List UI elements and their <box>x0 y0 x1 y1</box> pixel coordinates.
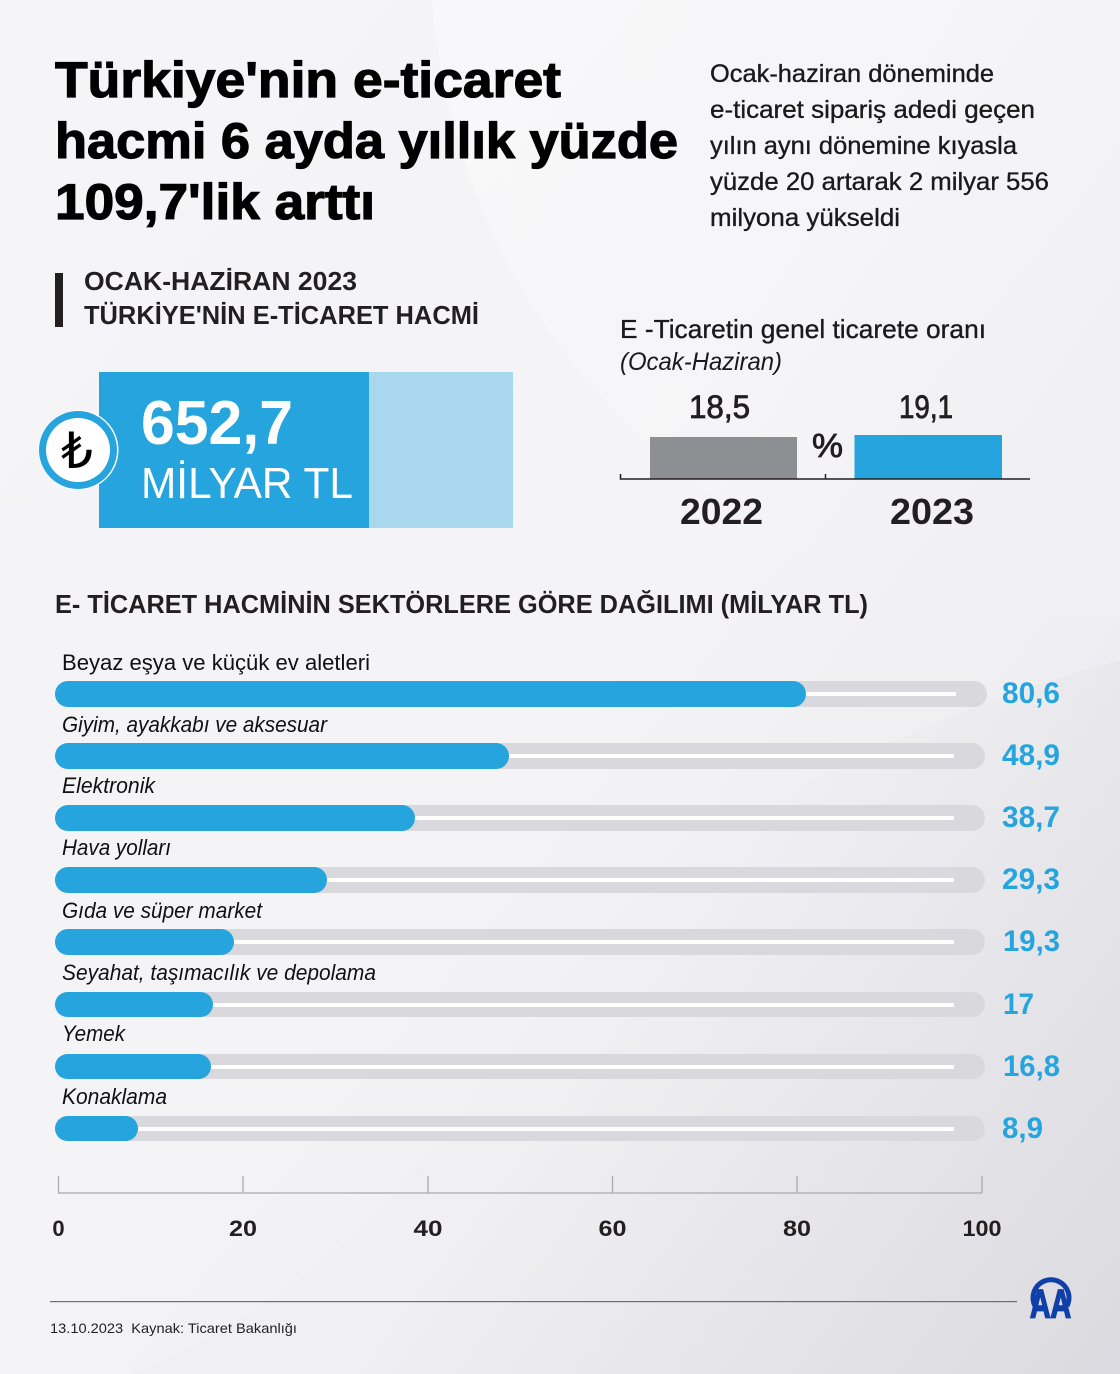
title: hacmi 6 ayda yıllık yüzde <box>55 113 678 169</box>
axis <box>620 474 1030 479</box>
section heading: total volume: TÜRKİYE'NİN E-TİCARET HACMİ <box>84 300 479 330</box>
intro text: e-ticaret sipariş adedi geçen <box>710 96 1035 124</box>
percent sign: % <box>812 427 843 464</box>
intro text <box>710 60 1049 232</box>
section heading: total volume: OCAK-HAZİRAN 2023 <box>84 266 357 296</box>
row: Giyim: 48,9 <box>1002 739 1060 772</box>
intro text: Ocak-haziran döneminde <box>710 60 994 88</box>
heading: sector breakdown: E- TİCARET HACMİNİN SEKTÖRLERE GÖRE DAĞILIMI (MİLYAR TL) <box>55 589 868 619</box>
year 2023: 2023 <box>890 491 974 532</box>
intro text: yılın aynı dönemine kıyasla <box>710 132 1017 160</box>
year 2022: 2022 <box>680 491 763 532</box>
total unit: MİLYAR TL <box>141 459 353 508</box>
row: Yemek <box>55 1021 1060 1083</box>
chart subheading: (Ocak-Haziran) <box>620 348 782 376</box>
logo: AA: AA <box>1030 1282 1071 1326</box>
row: Konaklama <box>55 1084 1043 1145</box>
x axis <box>52 1176 1002 1241</box>
row: Konaklama: 8,9 <box>1002 1112 1043 1145</box>
row: Beyaz eşya: Beyaz eşya ve küçük ev aletleri <box>62 650 370 675</box>
footer: date and source: 13.10.2023 Kaynak: Ticaret Bakanlığı <box>50 1320 297 1336</box>
x axis: 100 <box>962 1216 1002 1241</box>
row: Gıda: Gıda ve süper market <box>62 898 263 923</box>
total value: 652,7 <box>141 389 293 458</box>
title <box>55 52 678 230</box>
x axis: 80 <box>783 1216 811 1241</box>
row: Gıda: 19,3 <box>1003 925 1060 958</box>
x axis: 40 <box>414 1216 442 1241</box>
bar 2022 <box>650 437 797 479</box>
value 2023: 19,1 <box>899 389 953 425</box>
row: Seyahat: Seyahat, taşımacılık ve depolama <box>62 960 376 985</box>
row: Beyaz eşya <box>55 650 1060 710</box>
row: Elektronik: 38,7 <box>1002 801 1060 834</box>
row: Elektronik: Elektronik <box>62 773 156 798</box>
title: 109,7'lik arttı <box>55 174 375 230</box>
title: Türkiye'nin e-ticaret <box>55 52 561 108</box>
row: Gıda <box>55 898 1060 958</box>
section heading: total volume <box>55 266 479 330</box>
row: Yemek: Yemek <box>62 1021 126 1046</box>
bar chart: sectors <box>55 650 1060 1145</box>
x axis: 20 <box>229 1216 257 1241</box>
chart heading: E -Ticaretin genel ticarete oranı <box>620 314 986 344</box>
row: Seyahat <box>55 960 1034 1021</box>
x axis: 0 <box>52 1216 65 1241</box>
panel: total volume <box>38 372 513 528</box>
row: Yemek: 16,8 <box>1003 1050 1060 1083</box>
bar 2023 <box>854 435 1002 479</box>
row: Hava yolları <box>55 835 1060 896</box>
chart: e-commerce share of total trade <box>620 314 1030 532</box>
value 2022: 18,5 <box>689 389 750 425</box>
row: Giyim: Giyim, ayakkabı ve aksesuar <box>62 712 329 737</box>
row: Elektronik <box>55 773 1060 834</box>
intro text: milyona yükseldi <box>710 204 900 232</box>
row: Giyim <box>55 712 1060 772</box>
row: Hava yolları: Hava yolları <box>62 835 171 860</box>
row: Hava yolları: 29,3 <box>1002 863 1060 896</box>
row: Beyaz eşya: 80,6 <box>1002 677 1060 710</box>
row: Seyahat: 17 <box>1003 988 1034 1021</box>
icon: lira coin <box>38 410 118 490</box>
intro text: yüzde 20 artarak 2 milyar 556 <box>710 168 1049 196</box>
icon: lira coin: ₺ <box>61 422 93 480</box>
logo: AA <box>1030 1280 1071 1326</box>
row: Konaklama: Konaklama <box>62 1084 167 1109</box>
x axis: 60 <box>598 1216 626 1241</box>
